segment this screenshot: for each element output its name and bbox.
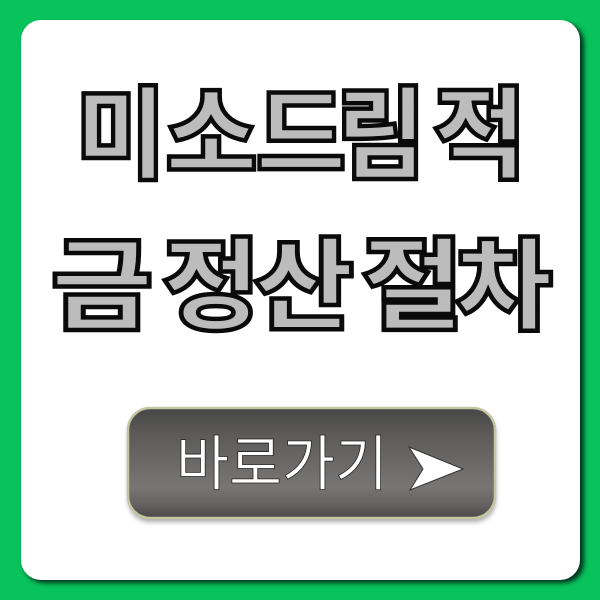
button shadow [128,412,496,522]
title line 2 [51,231,552,343]
title line 1: 적 [433,80,526,192]
title line 2: 차 [456,231,552,343]
title line 2: 산 [254,231,354,343]
title line 2: 금 [51,231,153,343]
title line 2: 절 [362,231,463,343]
button label: 바로가기 [176,431,388,498]
title line 2: 정 [162,231,260,343]
title line 1: 소 [166,80,258,192]
button body [128,408,495,518]
title line 1: 림 [336,80,426,192]
button: go to link [128,408,496,522]
icon: arrow [409,447,463,490]
title line 1 [76,80,526,192]
title line 1: 미 [76,80,166,192]
title line 1: 드 [256,80,346,192]
